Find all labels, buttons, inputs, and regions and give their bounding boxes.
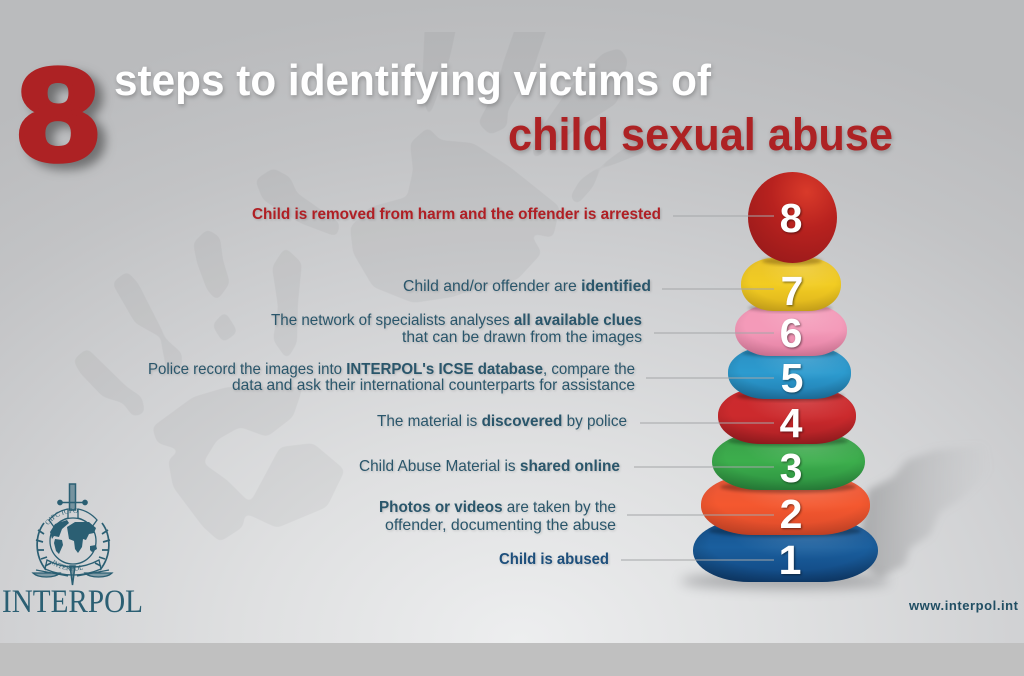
step 5 label bbox=[148, 361, 635, 394]
title: child sexual abuse bbox=[508, 109, 893, 160]
step numbers: 7 bbox=[781, 268, 803, 314]
icon: emblem: OIPC ICPO bbox=[46, 508, 78, 524]
step 5 label: Police record the images into INTERPOL's ICSE database, compare the bbox=[148, 361, 635, 378]
icon: emblem bbox=[32, 483, 114, 586]
step 8 label: Child is removed from harm and the offender is arrested bbox=[252, 206, 661, 223]
step numbers bbox=[779, 195, 803, 583]
step numbers: 5 bbox=[781, 355, 803, 401]
step numbers: 6 bbox=[780, 310, 802, 356]
step numbers: 3 bbox=[780, 445, 802, 491]
ring 3 bbox=[712, 433, 865, 493]
ground shadow bbox=[680, 573, 890, 589]
step 2 label bbox=[379, 499, 616, 534]
step 2 label: offender, documenting the abuse bbox=[385, 517, 616, 534]
INTERPOL logo bbox=[2, 483, 143, 620]
ring 6 bbox=[735, 305, 847, 357]
step numbers: 2 bbox=[780, 491, 802, 537]
leader lines bbox=[621, 216, 774, 560]
ring 4 bbox=[718, 388, 856, 446]
title bbox=[114, 56, 893, 160]
ring 2 bbox=[701, 475, 870, 537]
scales bbox=[33, 570, 112, 577]
wordmark: INTERPOL bbox=[2, 584, 143, 620]
banners bbox=[45, 509, 101, 575]
ring 1 bbox=[693, 519, 878, 582]
title: steps to identifying victims of bbox=[114, 56, 711, 105]
step 1 label: Child is abused bbox=[499, 551, 609, 568]
sword bbox=[60, 484, 85, 585]
step 4 label: The material is discovered by police bbox=[377, 413, 627, 430]
step 5 label: data and ask their international counterparts for assistance bbox=[232, 377, 635, 394]
step 6 label: that can be drawn from the images bbox=[402, 329, 642, 346]
ring 5 bbox=[728, 347, 851, 401]
bottom band bbox=[0, 643, 1024, 676]
ball 8 bbox=[748, 172, 837, 265]
big red numeral 8: 8 bbox=[17, 40, 99, 188]
wreath bbox=[36, 523, 110, 570]
globe bbox=[50, 518, 96, 564]
step numbers: 8 bbox=[780, 195, 802, 241]
step 6 label: The network of specialists analyses all available clues bbox=[271, 312, 642, 329]
tower cast shadow bbox=[855, 445, 992, 577]
step 6 label bbox=[271, 312, 642, 346]
step 7 label: Child and/or offender are identified bbox=[403, 278, 651, 295]
handprints watermark bbox=[76, 203, 558, 540]
ring 7 bbox=[741, 258, 841, 312]
step numbers: 1 bbox=[779, 537, 801, 583]
step numbers: 4 bbox=[780, 400, 803, 446]
website: www.interpol.int bbox=[908, 598, 1019, 613]
step 2 label: Photos or videos are taken by the bbox=[379, 499, 616, 516]
icon: emblem: INTERPOL bbox=[52, 560, 83, 571]
step 3 label: Child Abuse Material is shared online bbox=[359, 458, 620, 475]
stacking toy bbox=[693, 172, 878, 582]
